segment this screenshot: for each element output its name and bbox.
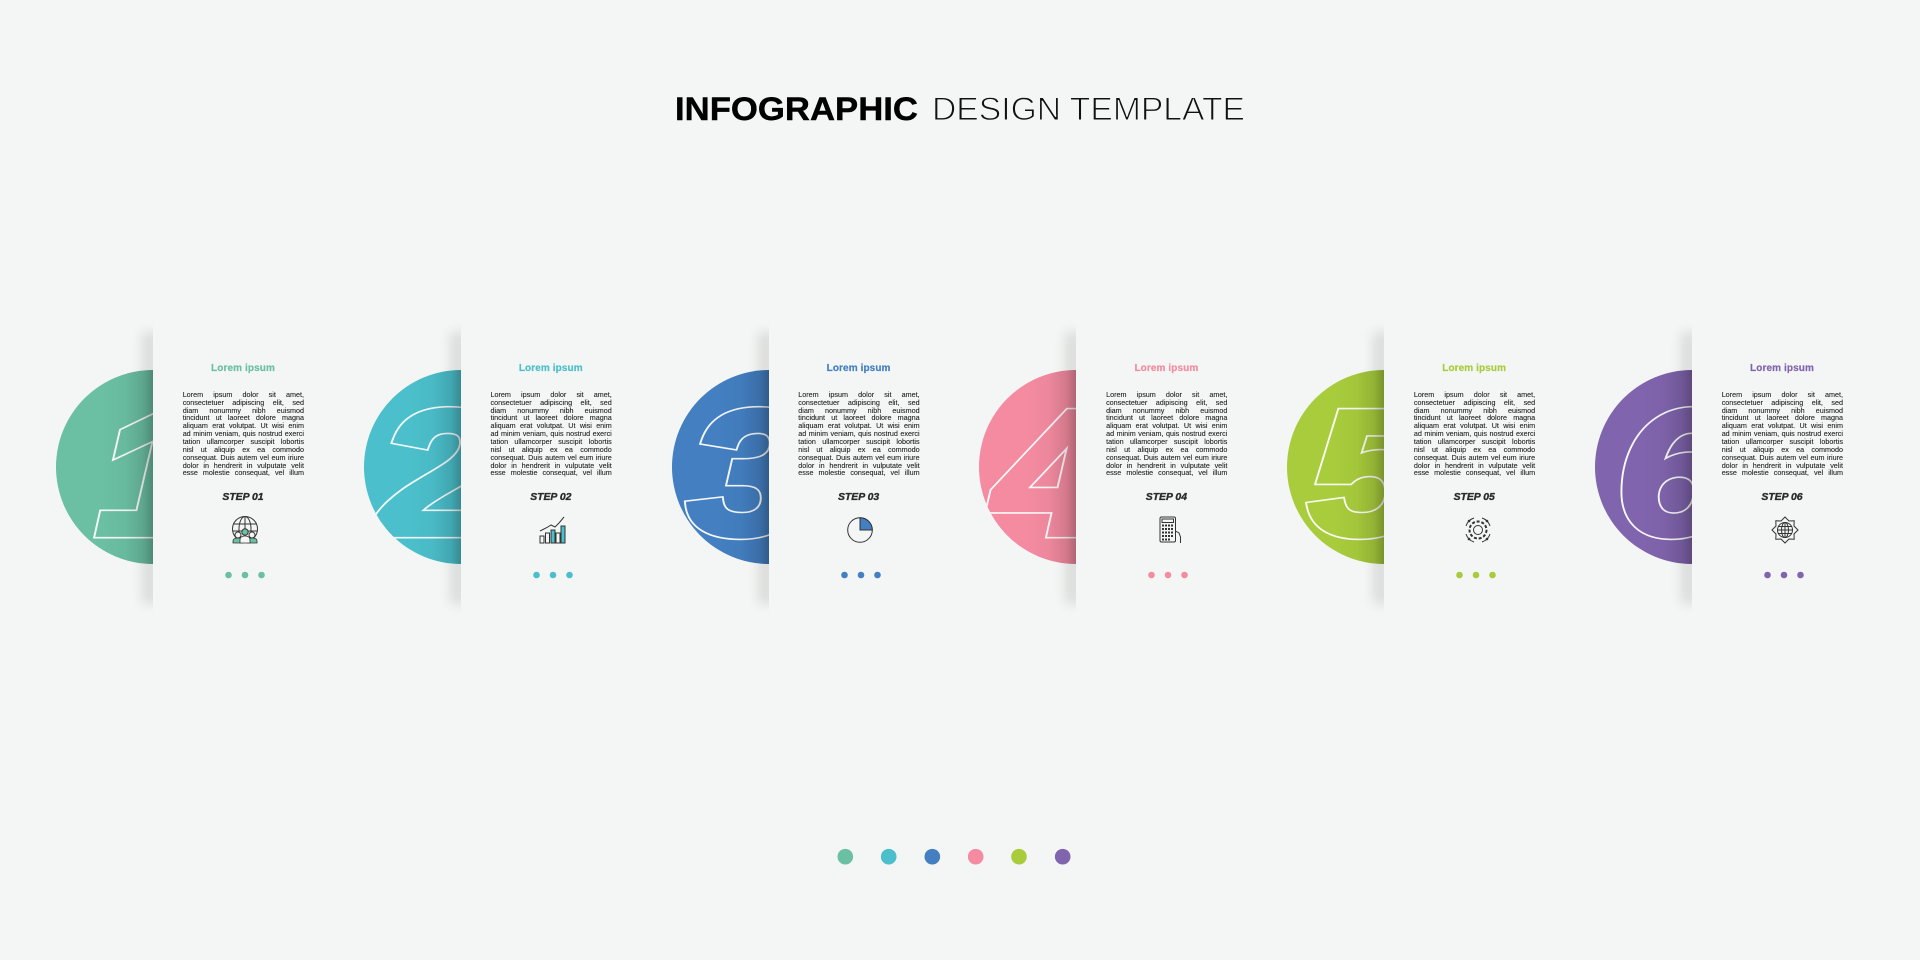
body text: ad minim veniam, quis nostrud exerci <box>1414 429 1535 438</box>
card 1 <box>153 320 358 615</box>
body text: dolor in hendrerit in vulputate velit <box>1106 461 1227 470</box>
body text <box>1722 390 1844 477</box>
dots <box>841 572 881 578</box>
title: INFOGRAPHIC <box>675 91 918 127</box>
body text: aliquam erat volutpat. Ut wisi enim <box>490 421 612 430</box>
heading: Lorem ipsum <box>1134 363 1198 374</box>
step label: STEP 03 <box>838 492 879 503</box>
body text: ad minim veniam, quis nostrud exerci <box>1722 429 1843 438</box>
heading: Lorem ipsum <box>827 363 891 374</box>
body text: esse molestie consequat, vel illum <box>490 468 612 477</box>
card 2 <box>461 320 666 615</box>
icon: globe with people <box>232 516 258 544</box>
step label: STEP 04 <box>1146 492 1187 503</box>
body text: consectetuer adipiscing elit, sed <box>183 398 304 407</box>
body text: tation ullamcorper suscipit lobortis <box>1106 437 1227 446</box>
card 3 <box>769 320 974 615</box>
body text: consequat. Duis autem vel eum iriure <box>1106 453 1227 462</box>
body text: tation ullamcorper suscipit lobortis <box>183 437 304 446</box>
body text: aliquam erat volutpat. Ut wisi enim <box>1106 421 1227 430</box>
body text: nisl ut aliquip ex ea commodo <box>1414 445 1535 454</box>
heading: Lorem ipsum <box>211 363 275 374</box>
body text: Lorem ipsum dolor sit amet, <box>798 390 920 399</box>
body text: tincidunt ut laoreet dolore magna <box>1722 413 1843 422</box>
number circle 2 <box>364 330 461 606</box>
body text: tincidunt ut laoreet dolore magna <box>1106 413 1227 422</box>
body text: tation ullamcorper suscipit lobortis <box>1414 437 1535 446</box>
legend dots <box>838 848 1070 864</box>
body text: aliquam erat volutpat. Ut wisi enim <box>1414 421 1535 430</box>
icon: bar chart <box>540 516 566 544</box>
body text: ad minim veniam, quis nostrud exerci <box>1106 429 1227 438</box>
body text: consequat. Duis autem vel eum iriure <box>1722 453 1843 462</box>
body text: tation ullamcorper suscipit lobortis <box>1722 437 1843 446</box>
number circle 1 <box>56 330 153 606</box>
body text <box>182 390 304 477</box>
card 5 <box>1384 320 1589 615</box>
body text: tincidunt ut laoreet dolore magna <box>798 413 920 422</box>
body text: aliquam erat volutpat. Ut wisi enim <box>798 421 920 430</box>
panel: step 6 <box>1595 330 1844 606</box>
card 4 <box>1076 320 1281 615</box>
body text: ad minim veniam, quis nostrud exerci <box>490 429 612 438</box>
body text: aliquam erat volutpat. Ut wisi enim <box>183 421 304 430</box>
body text: tation ullamcorper suscipit lobortis <box>798 437 920 446</box>
body text: consectetuer adipiscing elit, sed <box>1106 398 1227 407</box>
body text: tation ullamcorper suscipit lobortis <box>490 437 612 446</box>
body text: diam nonummy nibh euismod <box>183 406 304 415</box>
body text: consequat. Duis autem vel eum iriure <box>798 453 920 462</box>
heading: Lorem ipsum <box>1750 363 1814 374</box>
icon: calculator with hand <box>1160 516 1181 543</box>
body text: nisl ut aliquip ex ea commodo <box>183 445 304 454</box>
title: DESIGN TEMPLATE <box>932 91 1245 127</box>
dots <box>533 572 573 578</box>
dots <box>1456 572 1496 578</box>
dots <box>1148 572 1188 578</box>
number circle 3 <box>672 330 769 606</box>
body text: esse molestie consequat, vel illum <box>1414 468 1535 477</box>
heading: Lorem ipsum <box>1442 363 1506 374</box>
body text: ad minim veniam, quis nostrud exerci <box>798 429 920 438</box>
icon: globe network <box>1771 516 1799 544</box>
number circle 4 <box>979 330 1076 606</box>
panel: step 3 <box>672 330 920 606</box>
body text: diam nonummy nibh euismod <box>1106 406 1227 415</box>
dots <box>225 572 265 578</box>
dots <box>1764 572 1804 578</box>
number circle 5 <box>1287 330 1384 606</box>
body text: esse molestie consequat, vel illum <box>1722 468 1843 477</box>
body text: nisl ut aliquip ex ea commodo <box>1106 445 1227 454</box>
body text: diam nonummy nibh euismod <box>798 406 920 415</box>
body text: tincidunt ut laoreet dolore magna <box>1414 413 1535 422</box>
body text: esse molestie consequat, vel illum <box>183 468 304 477</box>
panel: step 1 <box>56 330 304 606</box>
body text: nisl ut aliquip ex ea commodo <box>798 445 920 454</box>
icon: pie chart <box>847 517 873 543</box>
body text: dolor in hendrerit in vulputate velit <box>1722 461 1843 470</box>
body text: esse molestie consequat, vel illum <box>798 468 920 477</box>
body text <box>490 390 612 477</box>
body text: dolor in hendrerit in vulputate velit <box>1414 461 1535 470</box>
body text: ad minim veniam, quis nostrud exerci <box>183 429 304 438</box>
body text: diam nonummy nibh euismod <box>490 406 612 415</box>
body text: nisl ut aliquip ex ea commodo <box>1722 445 1843 454</box>
step label: STEP 02 <box>530 492 571 503</box>
body text: consequat. Duis autem vel eum iriure <box>183 453 304 462</box>
body text <box>798 390 920 477</box>
body text: Lorem ipsum dolor sit amet, <box>1106 390 1227 399</box>
panel: step 5 <box>1287 330 1536 606</box>
body text: consequat. Duis autem vel eum iriure <box>490 453 612 462</box>
title <box>675 91 1245 127</box>
panel: step 4 <box>979 330 1228 606</box>
body text: dolor in hendrerit in vulputate velit <box>798 461 920 470</box>
step label: STEP 05 <box>1454 492 1495 503</box>
number circle 6 <box>1595 330 1692 606</box>
body text: consectetuer adipiscing elit, sed <box>798 398 920 407</box>
body text: Lorem ipsum dolor sit amet, <box>490 390 612 399</box>
body text: Lorem ipsum dolor sit amet, <box>1722 390 1843 399</box>
body text: tincidunt ut laoreet dolore magna <box>490 413 612 422</box>
body text: Lorem ipsum dolor sit amet, <box>183 390 304 399</box>
body text: consectetuer adipiscing elit, sed <box>490 398 612 407</box>
heading: Lorem ipsum <box>519 363 583 374</box>
body text: consequat. Duis autem vel eum iriure <box>1414 453 1535 462</box>
body text: diam nonummy nibh euismod <box>1414 406 1535 415</box>
body text: nisl ut aliquip ex ea commodo <box>490 445 612 454</box>
step label: STEP 01 <box>222 492 264 503</box>
body text: Lorem ipsum dolor sit amet, <box>1414 390 1535 399</box>
body text: tincidunt ut laoreet dolore magna <box>183 413 304 422</box>
body text <box>1106 390 1228 477</box>
body text <box>1414 390 1536 477</box>
step label: STEP 06 <box>1761 492 1803 503</box>
panel: step 2 <box>364 330 612 606</box>
body text: consectetuer adipiscing elit, sed <box>1722 398 1843 407</box>
body text: diam nonummy nibh euismod <box>1722 406 1843 415</box>
body text: aliquam erat volutpat. Ut wisi enim <box>1722 421 1843 430</box>
icon: gear cycle <box>1466 518 1490 542</box>
body text: esse molestie consequat, vel illum <box>1106 468 1227 477</box>
card 6 <box>1692 320 1897 615</box>
body text: consectetuer adipiscing elit, sed <box>1414 398 1535 407</box>
body text: dolor in hendrerit in vulputate velit <box>183 461 304 470</box>
body text: dolor in hendrerit in vulputate velit <box>490 461 612 470</box>
